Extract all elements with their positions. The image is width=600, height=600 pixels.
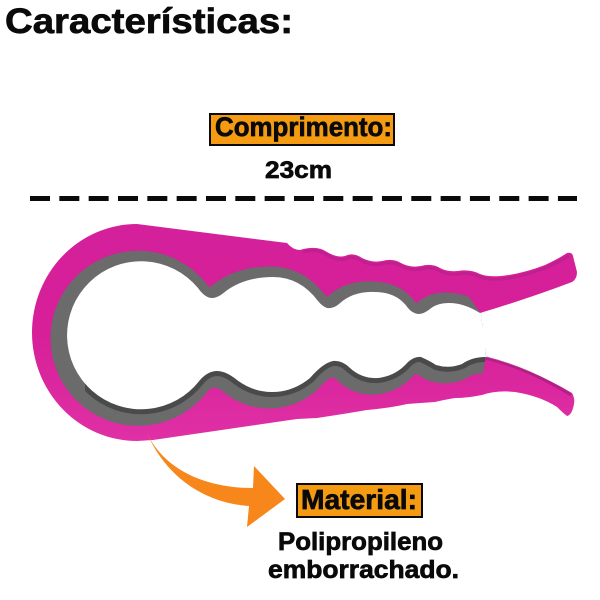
white opening [67, 261, 510, 409]
pink body [32, 224, 577, 441]
value: material description: emborrachado. [268, 556, 459, 584]
product: jar opener [32, 224, 577, 441]
value: material description [268, 528, 459, 584]
title: Características: [5, 2, 293, 41]
value: length: 23cm [265, 157, 332, 184]
gray inner grip band [64, 261, 510, 412]
dashed measurement line [30, 196, 577, 201]
darker shading on lower jaw [486, 358, 571, 395]
dark inner edge on lower side [85, 352, 486, 414]
label: comprimento: Comprimento: [215, 112, 392, 142]
label: material: Material: [301, 484, 417, 515]
darker shading on upper jaw [303, 251, 569, 279]
arrow: material pointer [144, 426, 285, 527]
value: material description: Polipropileno [278, 528, 443, 556]
